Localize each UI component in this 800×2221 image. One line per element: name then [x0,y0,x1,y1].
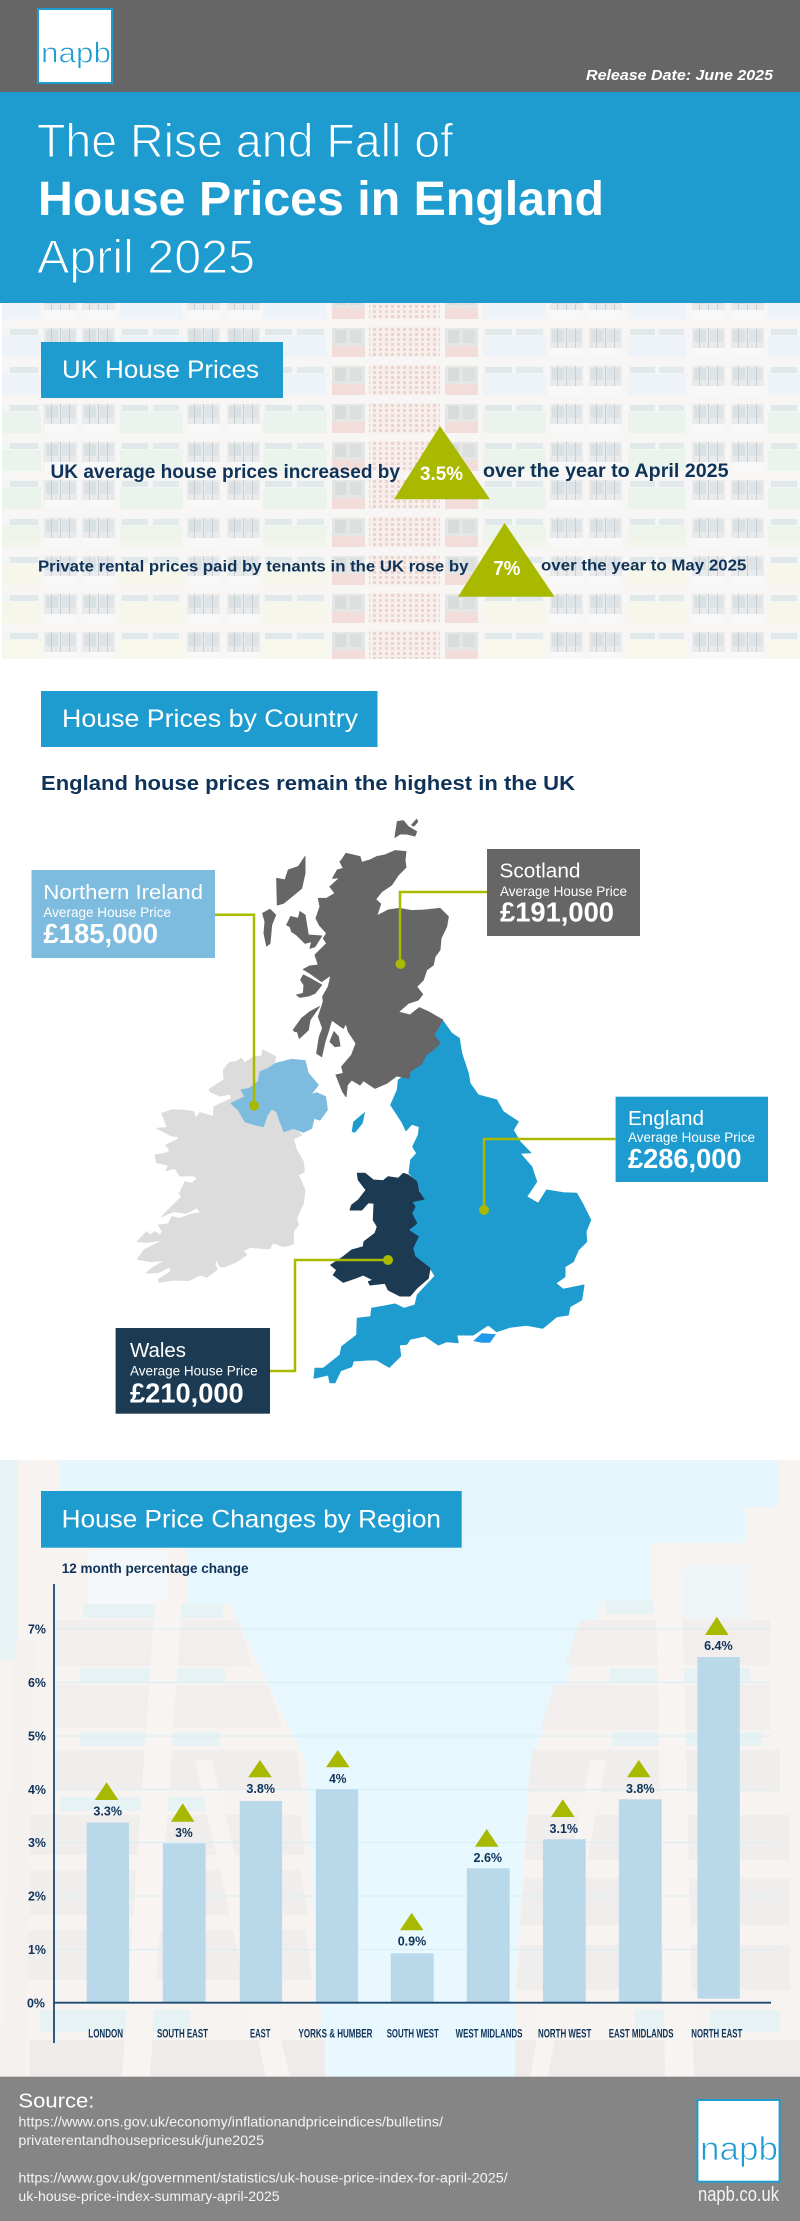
stat: rental prices 7%: over the year to May 2025 [541,558,747,575]
callout: Wales: Wales [130,1340,186,1362]
background: tower block facade [0,303,800,659]
y axis labels: 3% [28,1835,46,1850]
heading: UK House Prices [41,342,283,398]
callout: Wales: Average House Price [130,1363,258,1379]
bar: Yorks and Humber 4%: 4% [329,1771,347,1786]
callout: Northern Ireland: Average House Price [43,904,171,920]
bar: North East 6.4% [691,1617,743,2040]
bar: South West 0.9%: 0.9% [398,1934,427,1949]
title band: The Rise and Fall of [37,114,454,167]
map: Northern Ireland [231,1059,327,1132]
callout: England: England [628,1108,704,1130]
bar: London 3.3%: LONDON [88,2026,123,2040]
heading: House Price Changes by Region [41,1491,462,1548]
y axis labels: 2% [28,1888,46,1904]
bar: South East 3%: 3% [175,1825,193,1840]
bar: West Midlands 2.6%: 2.6% [474,1850,503,1865]
y axis labels: 7% [28,1622,46,1636]
y axis labels: 6% [28,1675,46,1690]
stat: rental prices 7%: Private rental prices paid by tenants in the UK rose by [38,559,468,576]
map: England [314,1021,591,1383]
header bar [0,0,800,92]
panel: house price changes by region [0,1460,800,2077]
map: Wales [331,1173,430,1296]
source links: https://www.gov.uk/government/statistics/uk-house-price-index-for-april-2025/ [18,2170,508,2186]
map: Scotland [263,819,448,1097]
callout: Northern Ireland: £185,000 [43,918,158,949]
y axis labels: 5% [28,1728,46,1744]
chart axes [54,1584,771,2043]
subheading: England house prices remain the highest in the UK [41,773,576,795]
stat: house prices 3.5%: UK average house prices increased by [50,462,400,483]
title band: April 2025 [37,230,255,283]
bar: South West 0.9%: SOUTH WEST [387,2026,439,2040]
source links: uk-house-price-index-summary-april-2025 [18,2188,280,2204]
bar: London 3.3% [87,1782,129,2040]
stat: house prices 3.5%: 3.5% [420,464,463,485]
callout: Scotland: Average House Price [500,883,627,899]
source links: https://www.ons.gov.uk/economy/inflationandpriceindices/bulletins/ [18,2114,443,2130]
bar: East 3.8%: EAST [250,2026,271,2040]
panel: UK house prices [0,303,800,659]
bar: North East 6.4%: NORTH EAST [691,2026,743,2040]
chart subtitle: 12 month percentage change [62,1560,249,1576]
background: apartment buildings against sky [0,1460,800,2077]
callout: Wales: £210,000 [130,1378,244,1409]
bar: East Midlands 3.8%: EAST MIDLANDS [609,2026,674,2040]
callout: Northern Ireland [32,870,259,1111]
bar: West Midlands 2.6%: WEST MIDLANDS [456,2026,522,2040]
stat: rental prices 7%: 7% [493,558,521,580]
stat: house prices 3.5%: over the year to April 2025 [483,461,729,482]
source links [18,2114,508,2204]
bar: North West 3.1%: NORTH WEST [538,2026,592,2040]
bar chart [27,1584,771,2043]
bar: East Midlands 3.8%: 3.8% [626,1781,655,1796]
callout: Wales [116,1255,393,1414]
map: Isle of Man [352,1112,365,1133]
map: Republic of Ireland [137,1050,305,1282]
logo: napb: napb [41,38,111,70]
y axis labels: 1% [28,1942,46,1957]
y axis labels [27,1622,46,2010]
y axis labels: 0% [27,1996,45,2010]
footer [0,2077,800,2221]
website: napb.co.uk [698,2184,780,2206]
bar: North West 3.1%: 3.1% [550,1821,579,1836]
bar: Yorks and Humber 4% [298,1750,373,2040]
callout: Scotland: £191,000 [500,897,614,928]
stat: rental prices 7% [38,523,747,597]
bar: Yorks and Humber 4%: YORKS & HUMBER [298,2026,373,2040]
callout: Scotland [396,849,640,969]
stat: house prices 3.5% [50,426,729,499]
bar: London 3.3%: 3.3% [93,1804,122,1819]
y axis labels: 4% [28,1782,46,1797]
callout: England: Average House Price [628,1129,755,1145]
source links: privaterentandhousepricesuk/june2025 [18,2132,264,2148]
callout: England: £286,000 [628,1143,742,1174]
bar: North East 6.4%: 6.4% [704,1638,733,1653]
bar: East 3.8%: 3.8% [246,1781,275,1796]
title band [0,92,800,303]
bar: East 3.8% [240,1760,282,2040]
heading: House Prices by Country: House Prices by Country [62,705,359,733]
title band: House Prices in England [38,173,604,226]
bar: North West 3.1% [538,1799,592,2040]
footer logo: napb: napb [700,2130,778,2167]
footer logo: napb [697,2100,780,2182]
bar: South East 3%: SOUTH EAST [157,2026,208,2040]
map: United Kingdom and Ireland [137,819,591,1383]
logo: napb [38,9,112,83]
callout: England [479,1097,768,1215]
bar: West Midlands 2.6% [456,1829,522,2040]
heading: House Prices by Country [41,691,378,747]
bar: South West 0.9% [387,1913,439,2040]
bar: South East 3% [157,1803,208,2040]
heading: UK House Prices: UK House Prices [62,356,259,384]
map: Isle of Wight [473,1333,496,1343]
bar: East Midlands 3.8% [609,1760,674,2040]
source heading: Source: [18,2091,94,2113]
release date: Release Date: June 2025 [586,67,774,84]
callout: Northern Ireland: Northern Ireland [43,882,203,904]
callout: Scotland: Scotland [500,861,580,883]
heading: House Price Changes by Region: House Price Changes by Region [62,1506,441,1534]
panel: house prices by country [32,691,768,1414]
